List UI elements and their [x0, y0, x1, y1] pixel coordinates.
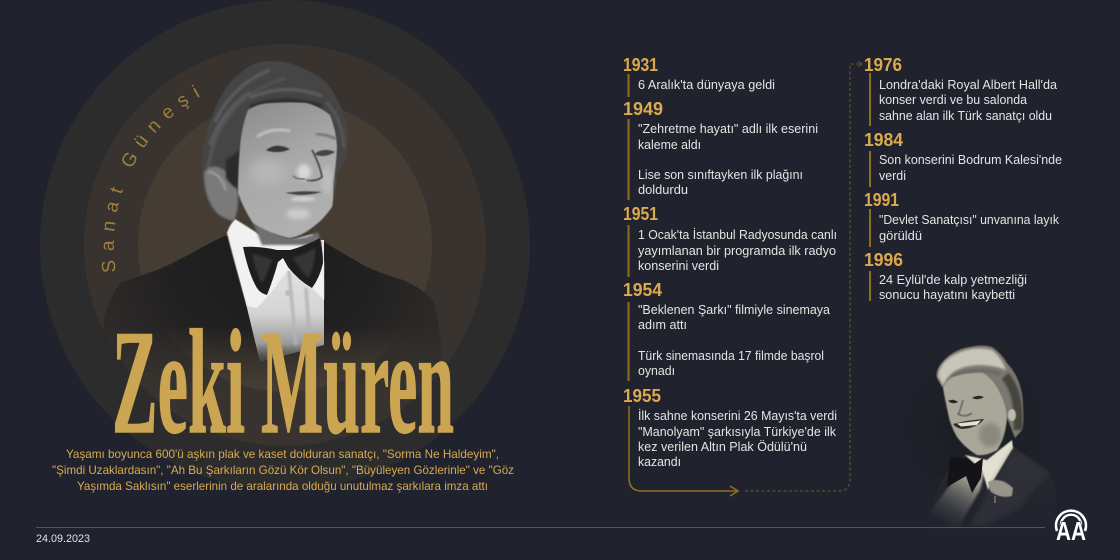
- summary paragraph: "Şimdi Uzaklardasın", "Ah Bu Şarkıların Gözü Kör Olsun", "Büyüleyen Gözlerinle" ve "Göz: [52, 463, 514, 477]
- arc text: Sanat Güneşi: Sanat Güneşi: [102, 84, 200, 272]
- timeline entry 1954: "Beklenen Şarkı" filmiyle sinemaya: [638, 303, 830, 317]
- timeline entry 1949: doldurdu: [638, 183, 688, 197]
- timeline entry 1996: 1996: [864, 250, 903, 270]
- timeline entry 1951: 1951: [623, 204, 658, 224]
- timeline entry 1949: [623, 99, 818, 200]
- timeline entry 1991: [864, 190, 1060, 247]
- small lapel: [970, 450, 1050, 525]
- timeline entry 1931: 1931: [623, 55, 658, 75]
- hair streaks: [208, 70, 344, 170]
- shirt button: [285, 290, 291, 296]
- timeline entry 1951: 1 Ocak'ta İstanbul Radyosunda canlı: [638, 228, 837, 242]
- timeline entry 1954: adım attı: [638, 318, 687, 332]
- face: [238, 102, 337, 238]
- timeline entry 1991: "Devlet Sanatçısı" unvanına layık: [879, 213, 1060, 227]
- timeline entry 1996: 24 Eylül'de kalp yetmezliği: [879, 273, 1027, 287]
- timeline entry 1954: [623, 280, 830, 381]
- timeline entry 1955: kez verilen Altın Plak Ödülü'nü: [638, 440, 807, 454]
- small collar: [965, 440, 1013, 490]
- summary paragraph: Yaşımda Saklısın" eserlerinin de aralarında olduğu unutulmaz şarkılara imza attı: [77, 479, 488, 493]
- summary paragraph: [52, 447, 514, 493]
- concentric sun circles: [40, 0, 530, 490]
- timeline entry 1954: Türk sinemasında 17 filmde başrol: [638, 349, 824, 363]
- timeline entry 1996: [864, 250, 1027, 302]
- small smiling portrait: [880, 335, 1070, 560]
- timeline entry 1951: konserini verdi: [638, 259, 719, 273]
- jacket: [104, 236, 441, 371]
- shirt: [230, 240, 324, 362]
- timeline entry 1984: verdi: [879, 169, 906, 183]
- timeline entry 1931: 6 Aralık'ta dünyaya geldi: [638, 78, 775, 92]
- small jacket: [925, 445, 1058, 560]
- side curl: [204, 166, 238, 221]
- chin shadow and neck: [250, 215, 322, 245]
- timeline entry 1954: 1954: [623, 280, 662, 300]
- icon: AA logo: AA: [1056, 516, 1086, 546]
- timeline entry 1984: [864, 130, 1062, 187]
- timeline entry 1951: yayımlanan bir programda ilk radyo: [638, 244, 836, 258]
- timeline entry 1955: [623, 386, 837, 469]
- timeline entry 1949: kaleme aldı: [638, 138, 701, 152]
- hair: [202, 61, 348, 221]
- timeline entry 1976: Londra'daki Royal Albert Hall'da: [879, 78, 1057, 92]
- timeline entry 1955: "Manolyam" şarkısıyla Türkiye'de ilk: [638, 425, 837, 439]
- facial shading: [250, 130, 336, 219]
- timeline entry 1991: 1991: [864, 190, 899, 210]
- timeline entry 1955: İlk sahne konserini 26 Mayıs'ta verdi: [638, 409, 837, 423]
- footer divider: [36, 527, 1045, 528]
- eyes: [266, 146, 290, 152]
- timeline entry 1949: "Zehretme hayatı" adlı ilk eserini: [638, 122, 818, 136]
- small hair: [937, 346, 1023, 438]
- collar: [227, 219, 324, 308]
- summary paragraph: Yaşamı boyunca 600'ü aşkın plak ve kaset dolduran sanatçı, "Sorma Ne Haldeyim",: [66, 447, 499, 461]
- timeline entry 1949: Lise son sınıftayken ilk plağını: [638, 168, 803, 182]
- date: 24.09.2023: [36, 533, 90, 545]
- timeline connector arrows: [629, 62, 862, 496]
- small face: [943, 373, 1007, 455]
- timeline entry 1954: oynadı: [638, 364, 675, 378]
- timeline entry 1976: sahne alan ilk Türk sanatçı oldu: [879, 109, 1052, 123]
- timeline entry 1955: 1955: [623, 386, 661, 406]
- main portrait of Zeki Müren: [104, 60, 441, 371]
- timeline entry 1996: sonucu hayatını kaybetti: [879, 288, 1015, 302]
- title: Zeki Müren: Zeki: [112, 300, 245, 465]
- small bow tie: [947, 457, 983, 493]
- small shirt: [930, 470, 985, 530]
- nose: [306, 150, 322, 181]
- small flower: [988, 480, 1013, 497]
- mouth: [285, 191, 322, 195]
- timeline entry 1984: Son konserini Bodrum Kalesi'nde: [879, 153, 1062, 167]
- text: Müren: [261, 300, 454, 465]
- sideburn: [226, 150, 245, 192]
- timeline entry 1949: 1949: [623, 99, 663, 119]
- timeline entry 1991: görüldü: [879, 229, 922, 243]
- eyebrows: [257, 130, 290, 137]
- timeline entry 1931: [623, 55, 775, 97]
- timeline entry 1976: konser verdi ve bu salonda: [879, 93, 1027, 107]
- timeline entry 1976: [864, 55, 1057, 126]
- timeline entry 1984: 1984: [864, 130, 903, 150]
- timeline entry 1976: 1976: [864, 55, 902, 75]
- timeline entry 1955: kazandı: [638, 455, 681, 469]
- bow tie: [243, 238, 323, 295]
- timeline entry 1951: [623, 204, 837, 277]
